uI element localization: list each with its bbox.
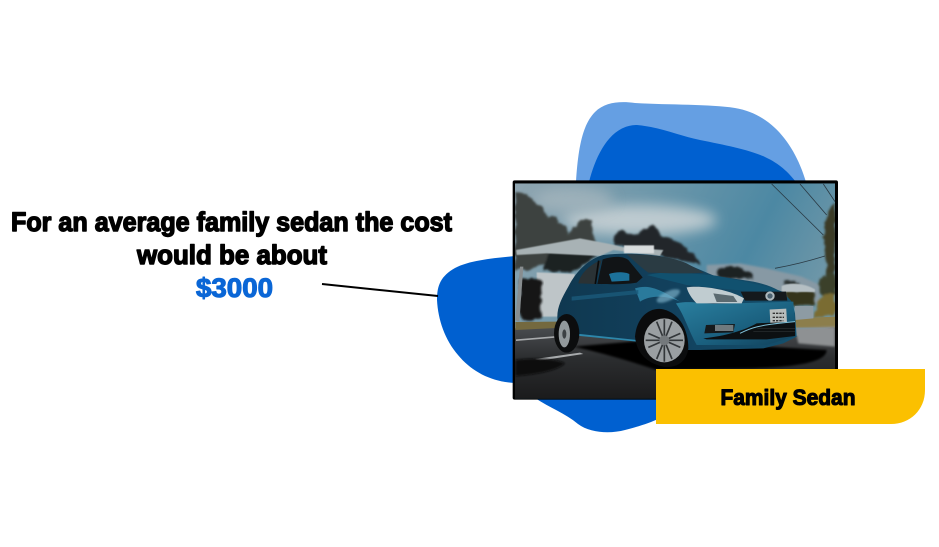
car body <box>557 254 797 350</box>
trees <box>515 190 837 317</box>
road <box>515 327 835 398</box>
blob: dark blue bottom shape <box>535 398 660 432</box>
grille, logo and plate <box>741 292 787 301</box>
cost value: $3000 <box>196 273 273 303</box>
door mirror <box>609 272 629 282</box>
lower grille <box>703 322 795 339</box>
infographic canvas <box>12 102 925 432</box>
photo: blue family sedan <box>513 180 838 400</box>
headlight <box>687 287 744 303</box>
connector line <box>322 284 438 296</box>
wheels <box>554 314 579 353</box>
label banner: Family Sedan <box>656 369 925 424</box>
distant hills <box>707 263 820 303</box>
hood <box>647 272 785 293</box>
front fender highlight <box>635 287 680 302</box>
windows <box>627 254 704 273</box>
label banner: Family Sedan: Family Sedan <box>720 385 856 410</box>
blob: dark blue upper shape <box>589 125 796 182</box>
heading text: For an average family sedan the cost <box>11 207 452 237</box>
power lines <box>772 184 835 268</box>
heading text <box>11 207 452 303</box>
blob: dark blue left shape <box>437 256 515 383</box>
car nose <box>676 302 796 345</box>
building <box>516 238 663 256</box>
heading text: would be about <box>136 240 327 270</box>
blob: light blue back shape <box>576 102 806 182</box>
